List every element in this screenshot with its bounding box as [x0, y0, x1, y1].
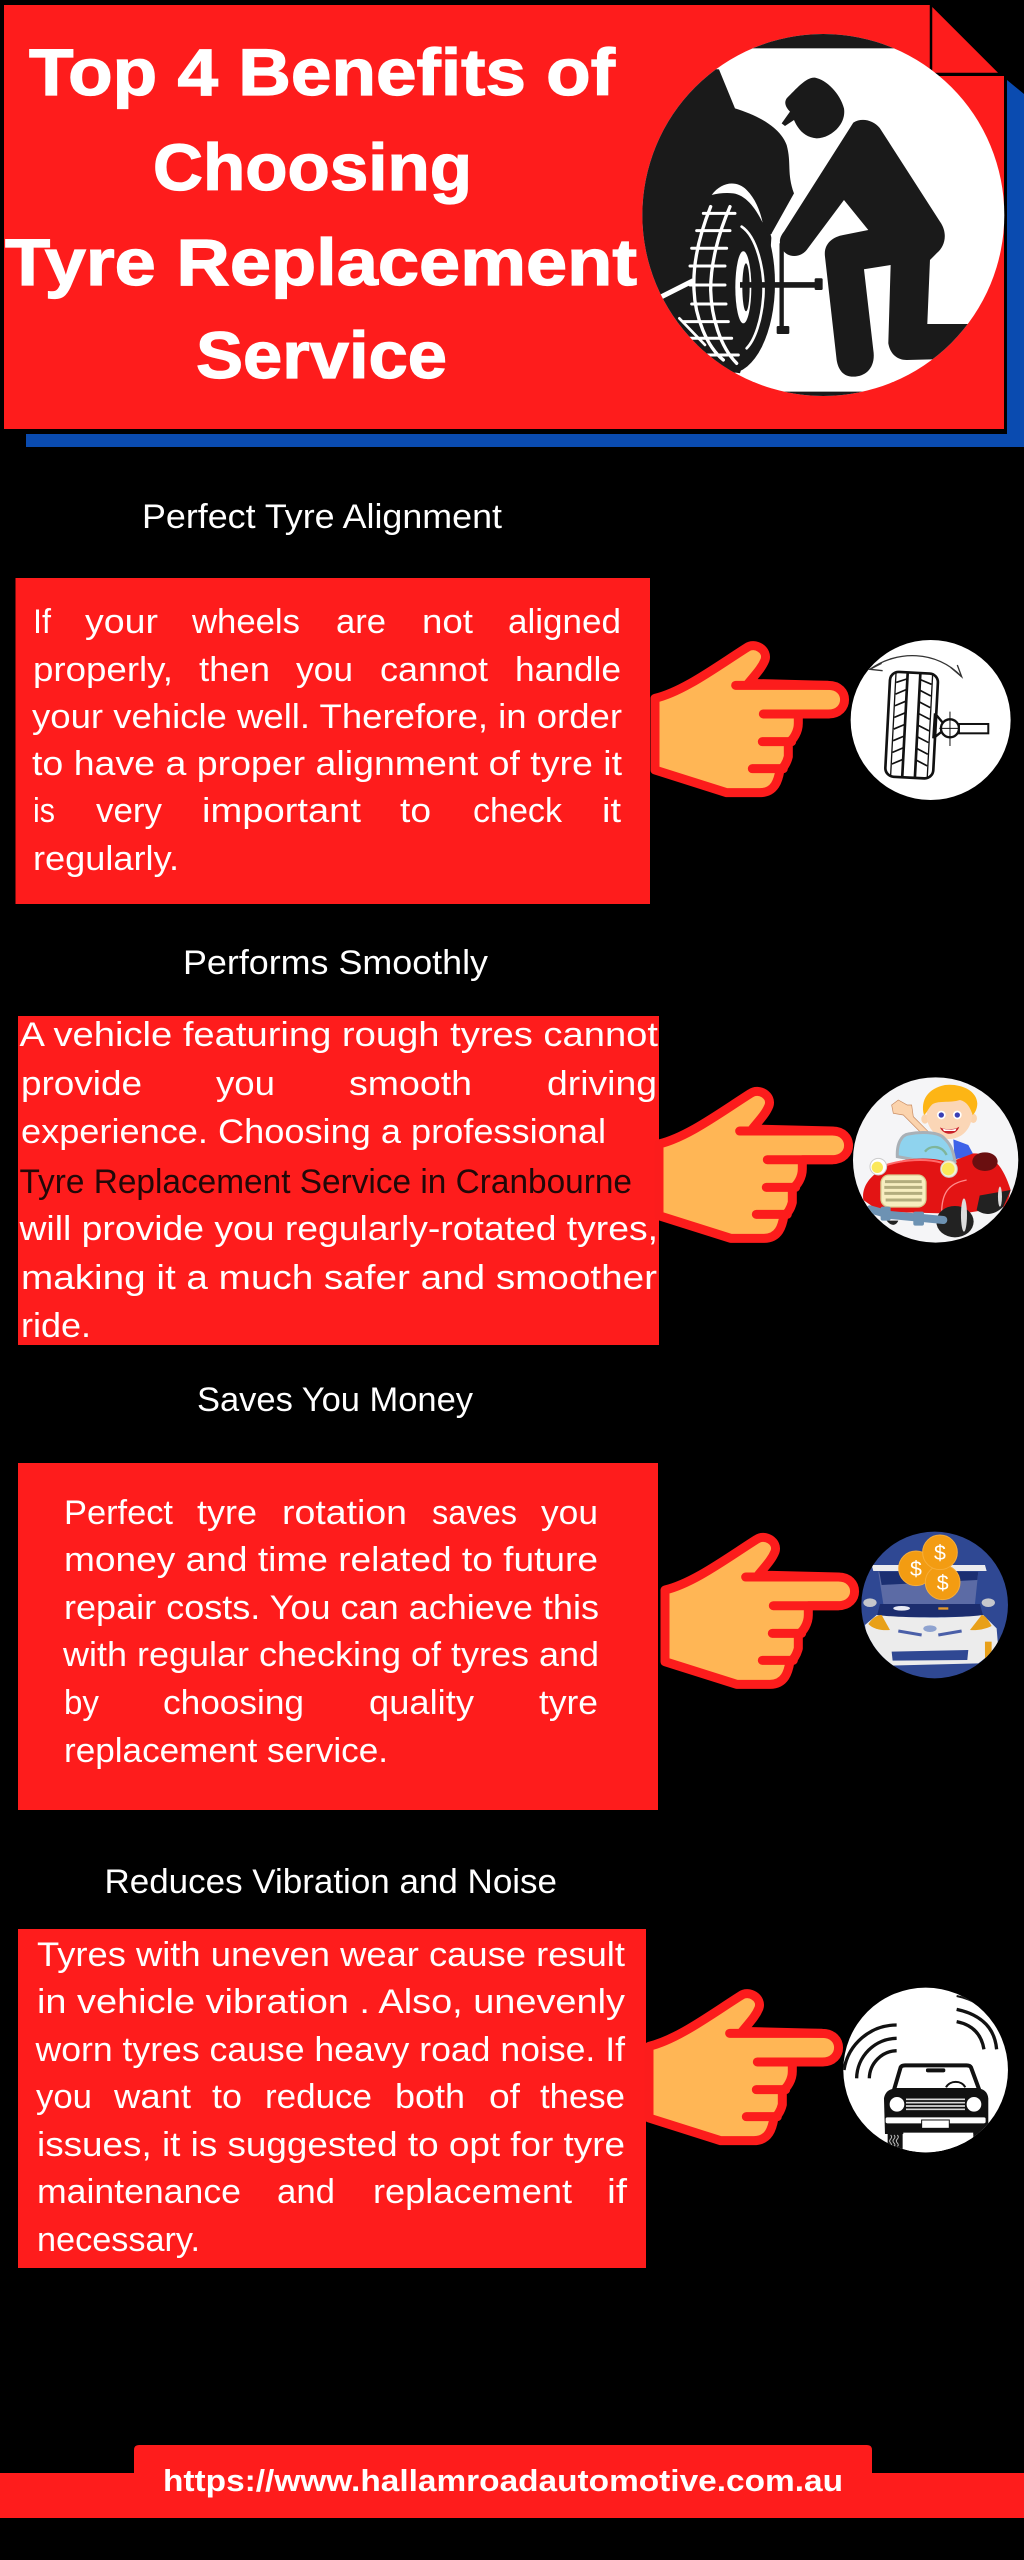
icon: pointing hand	[665, 1537, 855, 1684]
body text: repair costs. You can achieve this	[64, 1589, 599, 1627]
body text: then	[199, 651, 270, 689]
icon: car with open bonnet and coins: $	[937, 1571, 949, 1595]
body text: to	[212, 2078, 242, 2116]
red banner sheet	[3, 4, 1005, 430]
body text: very	[96, 792, 162, 830]
panel: Perfect Tyre Alignment	[16, 498, 1011, 904]
body text: with regular checking of tyres and	[62, 1636, 599, 1674]
body text: you	[541, 1494, 598, 1532]
body text: it	[602, 792, 622, 830]
body text: smooth	[349, 1065, 472, 1103]
icon: pointing hand	[649, 1994, 839, 2141]
body text: and	[277, 2173, 335, 2211]
body text: important	[202, 792, 362, 830]
body text: of	[489, 2078, 521, 2116]
body text	[32, 603, 623, 878]
body text: check	[473, 792, 563, 830]
icon: vibrating car front view	[843, 1988, 1008, 2153]
body text: money and time related to future	[64, 1541, 598, 1579]
body text	[34, 1936, 628, 2259]
body text	[62, 1494, 599, 1770]
heading: Performs Smoothly	[183, 944, 488, 982]
title: Top 4 Benefits of	[29, 35, 616, 109]
body text: replacement service.	[64, 1732, 388, 1770]
body text: to have a proper alignment of tyre it	[32, 745, 623, 783]
body text: issues, it is suggested to opt for tyre	[37, 2126, 625, 2164]
body text: regularly.	[33, 840, 179, 878]
heading: Reduces Vibration and Noise	[104, 1863, 557, 1901]
title: Choosing	[153, 130, 472, 204]
blue offset shadow	[26, 80, 1024, 447]
body text: will provide you regularly-rotated tyres,	[18, 1210, 658, 1248]
body text: cannot	[380, 651, 489, 689]
body text: by	[64, 1684, 99, 1722]
red text box	[16, 578, 650, 904]
body text: if	[607, 2173, 628, 2211]
body text: choosing	[163, 1684, 304, 1722]
body text: these	[540, 2078, 625, 2116]
body text: wheels	[191, 603, 300, 641]
body text: in vehicle vibration . Also, unevenly	[37, 1983, 625, 2021]
body text: rotation	[282, 1494, 407, 1532]
body text: is	[33, 792, 55, 830]
body text: you	[216, 1065, 275, 1103]
body text: to	[400, 792, 431, 830]
icon: car with open bonnet and coins: $	[934, 1541, 946, 1565]
body text: handle	[515, 651, 621, 689]
body text: tyre	[539, 1684, 598, 1722]
body text: driving	[547, 1065, 657, 1103]
icon: car with open bonnet and coins: $	[910, 1557, 922, 1581]
body text: making it a much safer and smoother	[21, 1259, 657, 1297]
body text	[18, 1016, 659, 1345]
title	[5, 35, 637, 392]
icon: boy driving red car	[853, 1077, 1018, 1243]
red text box	[18, 1016, 659, 1345]
body text: both	[395, 2078, 465, 2116]
icon: pointing hand	[659, 1091, 849, 1238]
heading: Perfect Tyre Alignment	[142, 498, 503, 536]
body text: your vehicle well. Therefore, in order	[32, 698, 622, 736]
panel: Saves You Money	[18, 1381, 1008, 1810]
red text box	[18, 1929, 646, 2268]
body text: necessary.	[37, 2221, 200, 2259]
body text: worn tyres cause heavy road noise. If	[34, 2031, 626, 2069]
body text: If	[33, 603, 52, 641]
body text: Tyres with uneven wear cause result	[37, 1936, 626, 1974]
folded corner	[931, 4, 1001, 74]
body text: you	[296, 651, 353, 689]
body text: saves	[432, 1494, 517, 1532]
body text: maintenance	[37, 2173, 241, 2211]
title: Service	[196, 318, 447, 392]
body text: not	[422, 603, 474, 641]
body text: A vehicle featuring rough tyres cannot	[20, 1016, 659, 1054]
panel: Performs Smoothly	[18, 944, 1018, 1345]
body text: experience. Choosing a professional	[21, 1113, 606, 1151]
red text box	[18, 1463, 658, 1810]
panel: Reduces Vibration and Noise	[18, 1863, 1008, 2268]
body text: Tyre Replacement Service in Cranbourne	[20, 1163, 632, 1201]
panel: footer website bar	[0, 2445, 1024, 2518]
body text: Perfect	[64, 1494, 174, 1532]
website url: https://www.hallamroadautomotive.com.au	[163, 2463, 843, 2498]
body text: replacement	[373, 2173, 573, 2211]
title: Tyre Replacement	[5, 225, 637, 299]
body text: quality	[369, 1684, 474, 1722]
body text: properly,	[33, 651, 173, 689]
body text: aligned	[508, 603, 621, 641]
red footer ribbon	[0, 2445, 1024, 2518]
icon: tyre alignment	[851, 640, 1011, 800]
body text: provide	[21, 1065, 142, 1103]
body text: want	[113, 2078, 192, 2116]
panel: header banner	[3, 4, 1024, 447]
body text: tyre	[197, 1494, 257, 1532]
icon: pointing hand	[655, 646, 845, 793]
body text: are	[336, 603, 386, 641]
body text: ride.	[21, 1307, 91, 1345]
body text: your	[85, 603, 158, 641]
icon: mechanic changing a tyre	[640, 30, 1010, 402]
body text: reduce	[265, 2078, 372, 2116]
icon: car with open bonnet and coins	[861, 1532, 1008, 1678]
body text: you	[36, 2078, 92, 2116]
heading: Saves You Money	[197, 1381, 473, 1419]
